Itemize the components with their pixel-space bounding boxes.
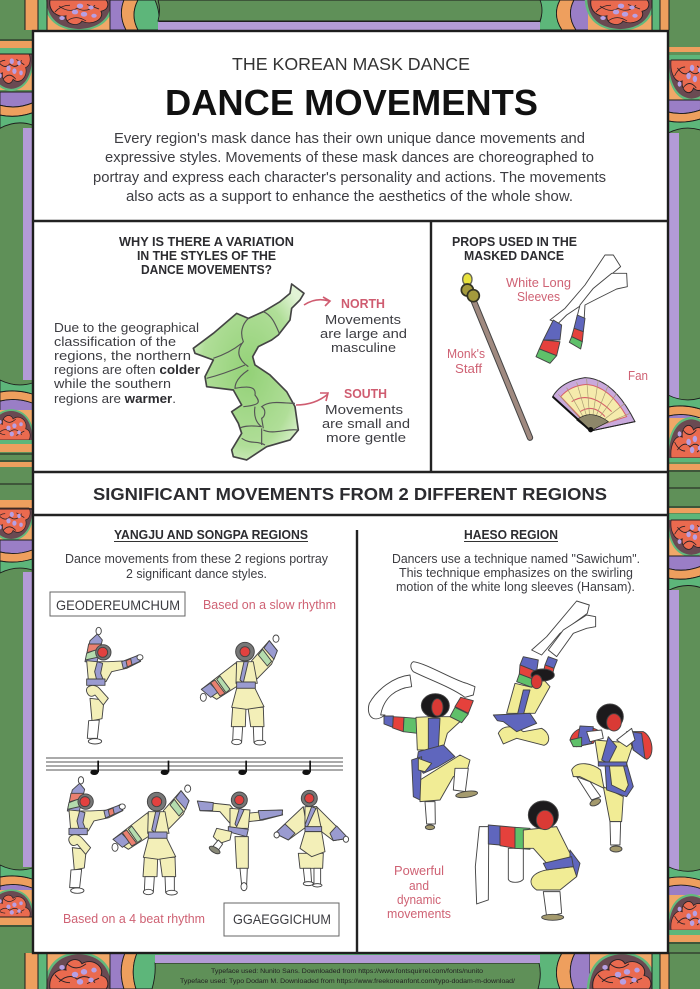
dancer: sawichum top — [493, 601, 596, 745]
label: monk's staff — [447, 347, 485, 376]
section heading: significant movements: SIGNIFICANT MOVEMENTS FROM 2 DIFFERENT REGIONS — [93, 484, 607, 504]
label box: Geodereumchum: GEODEREUMCHUM — [56, 597, 180, 613]
panel: variation in styles — [53, 235, 410, 460]
text block: Haeso description: This technique emphasizes on the swirling — [399, 566, 633, 580]
label: white long sleeves: Sleeves — [517, 290, 560, 304]
dancer: sawichum left — [368, 662, 478, 830]
callout: north: Movements — [325, 312, 402, 327]
dancer: geodereumchum pose 1 — [85, 627, 143, 744]
text block: geography: classification of the — [54, 334, 176, 349]
intro paragraph: expressive styles. Movements of these mask dances are choreographed to — [105, 150, 594, 166]
callout: south: more gentle — [326, 430, 406, 445]
text block: Yangju description: Dance movements from these 2 regions portray — [65, 552, 329, 566]
label: white long sleeves — [506, 276, 571, 304]
icon: monk's staff — [461, 273, 530, 438]
callout: south — [322, 386, 410, 445]
label box: Ggaeggichum — [224, 903, 339, 936]
text block: geography: regions, the northern — [54, 348, 191, 363]
text block: Yangju description: 2 significant dance styles. — [126, 567, 267, 581]
text block: Haeso description: Dancers use a technique named "Sawichum". — [392, 552, 640, 566]
label: white long sleeves: White Long — [506, 276, 571, 290]
footer credits — [180, 968, 515, 985]
note: powerful and dynamic: movements — [387, 907, 451, 921]
text block: Haeso description: motion of the white long sleeves (Hansam). — [396, 580, 635, 594]
dancer: ggaeggichum pose 3 — [197, 792, 283, 891]
heading: why variation: WHY IS THERE A VARIATION — [119, 235, 294, 249]
heading: Yangju and Songpa: YANGJU AND SONGPA REGIONS — [114, 528, 308, 542]
dancer: ggaeggichum pose 4 — [274, 790, 349, 887]
label box: Geodereumchum — [50, 592, 185, 616]
note: slow rhythm: Based on a slow rhythm — [203, 598, 336, 612]
note: 4 beat rhythm: Based on a 4 beat rhythm — [63, 912, 205, 926]
footer credits: Typeface used: Nunito Sans. Downloaded from https://www.fontsquirrel.com/fonts/nunito — [211, 968, 483, 975]
right border strip — [668, 47, 700, 953]
arrow: north — [304, 297, 330, 306]
text block: geography: regions are warmer. — [54, 391, 176, 406]
note: powerful and dynamic — [387, 864, 451, 921]
intro paragraph: also acts as a support to enhance the aesthetics of the whole show. — [126, 189, 573, 205]
heading: why variation: DANCE MOVEMENTS? — [141, 263, 272, 277]
arrow: south — [296, 393, 328, 405]
callout: north: are large and — [320, 326, 407, 341]
text block: geography: Due to the geographical — [54, 320, 199, 335]
note: powerful and dynamic: dynamic — [397, 893, 441, 907]
left border strip — [0, 40, 34, 926]
heading: props — [452, 235, 577, 263]
bottom border strip — [25, 953, 669, 989]
intro paragraph — [93, 131, 606, 205]
heading: why variation — [119, 235, 294, 277]
intro paragraph: portray and express each character's personality and actions. The movements — [93, 170, 606, 186]
heading: Haeso: HAESO REGION — [464, 528, 558, 542]
callout: south: SOUTH — [344, 386, 387, 401]
panel: Yangju and Songpa regions — [46, 528, 349, 936]
callout: north — [320, 296, 407, 355]
main title: DANCE MOVEMENTS — [165, 82, 538, 123]
intro paragraph: Every region's mask dance has their own unique dance movements and — [114, 131, 585, 147]
panel: Haeso region — [368, 528, 652, 921]
dancer: sawichum right — [570, 704, 652, 852]
label: monk's staff: Staff — [455, 362, 483, 376]
note: powerful and dynamic: and — [409, 879, 429, 893]
icon: white long sleeves — [536, 255, 627, 363]
kicker title: THE KOREAN MASK DANCE — [232, 54, 470, 74]
callout: south: Movements — [325, 402, 404, 417]
text block: geography: regions are often colder — [54, 362, 200, 377]
panel: props — [447, 235, 648, 438]
title block — [93, 54, 606, 205]
heading: why variation: IN THE STYLES OF THE — [137, 249, 276, 263]
callout: south: are small and — [322, 416, 410, 431]
text block: geography — [53, 320, 200, 406]
icon: fan — [553, 378, 635, 432]
label: fan: Fan — [628, 369, 648, 383]
dancer: geodereumchum pose 2 — [200, 635, 279, 745]
footer credits: Typeface used: Typo Dodam M. Downloaded from https://www.freekoreanfont.com/typo-dodam-m-download/ — [180, 978, 515, 985]
heading: props: PROPS USED IN THE — [452, 235, 577, 249]
text block: geography: while the southern — [53, 376, 171, 391]
dancer: ggaeggichum pose 1 — [67, 777, 125, 893]
text block: Haeso description — [392, 552, 640, 594]
map of Korea — [193, 284, 304, 460]
label: monk's staff: Monk's — [447, 347, 485, 361]
note: powerful and dynamic: Powerful — [394, 864, 444, 878]
heading: props: MASKED DANCE — [464, 249, 564, 263]
label box: Ggaeggichum: GGAEGGICHUM — [233, 911, 331, 927]
top border strip — [25, 0, 669, 30]
callout: north: masculine — [331, 340, 396, 355]
music staff with beat notes — [46, 758, 343, 775]
dancer: ggaeggichum pose 2 — [112, 785, 191, 895]
text block: Yangju description — [65, 552, 329, 581]
dancer: sawichum bottom — [475, 801, 580, 920]
callout: north: NORTH — [341, 296, 385, 311]
